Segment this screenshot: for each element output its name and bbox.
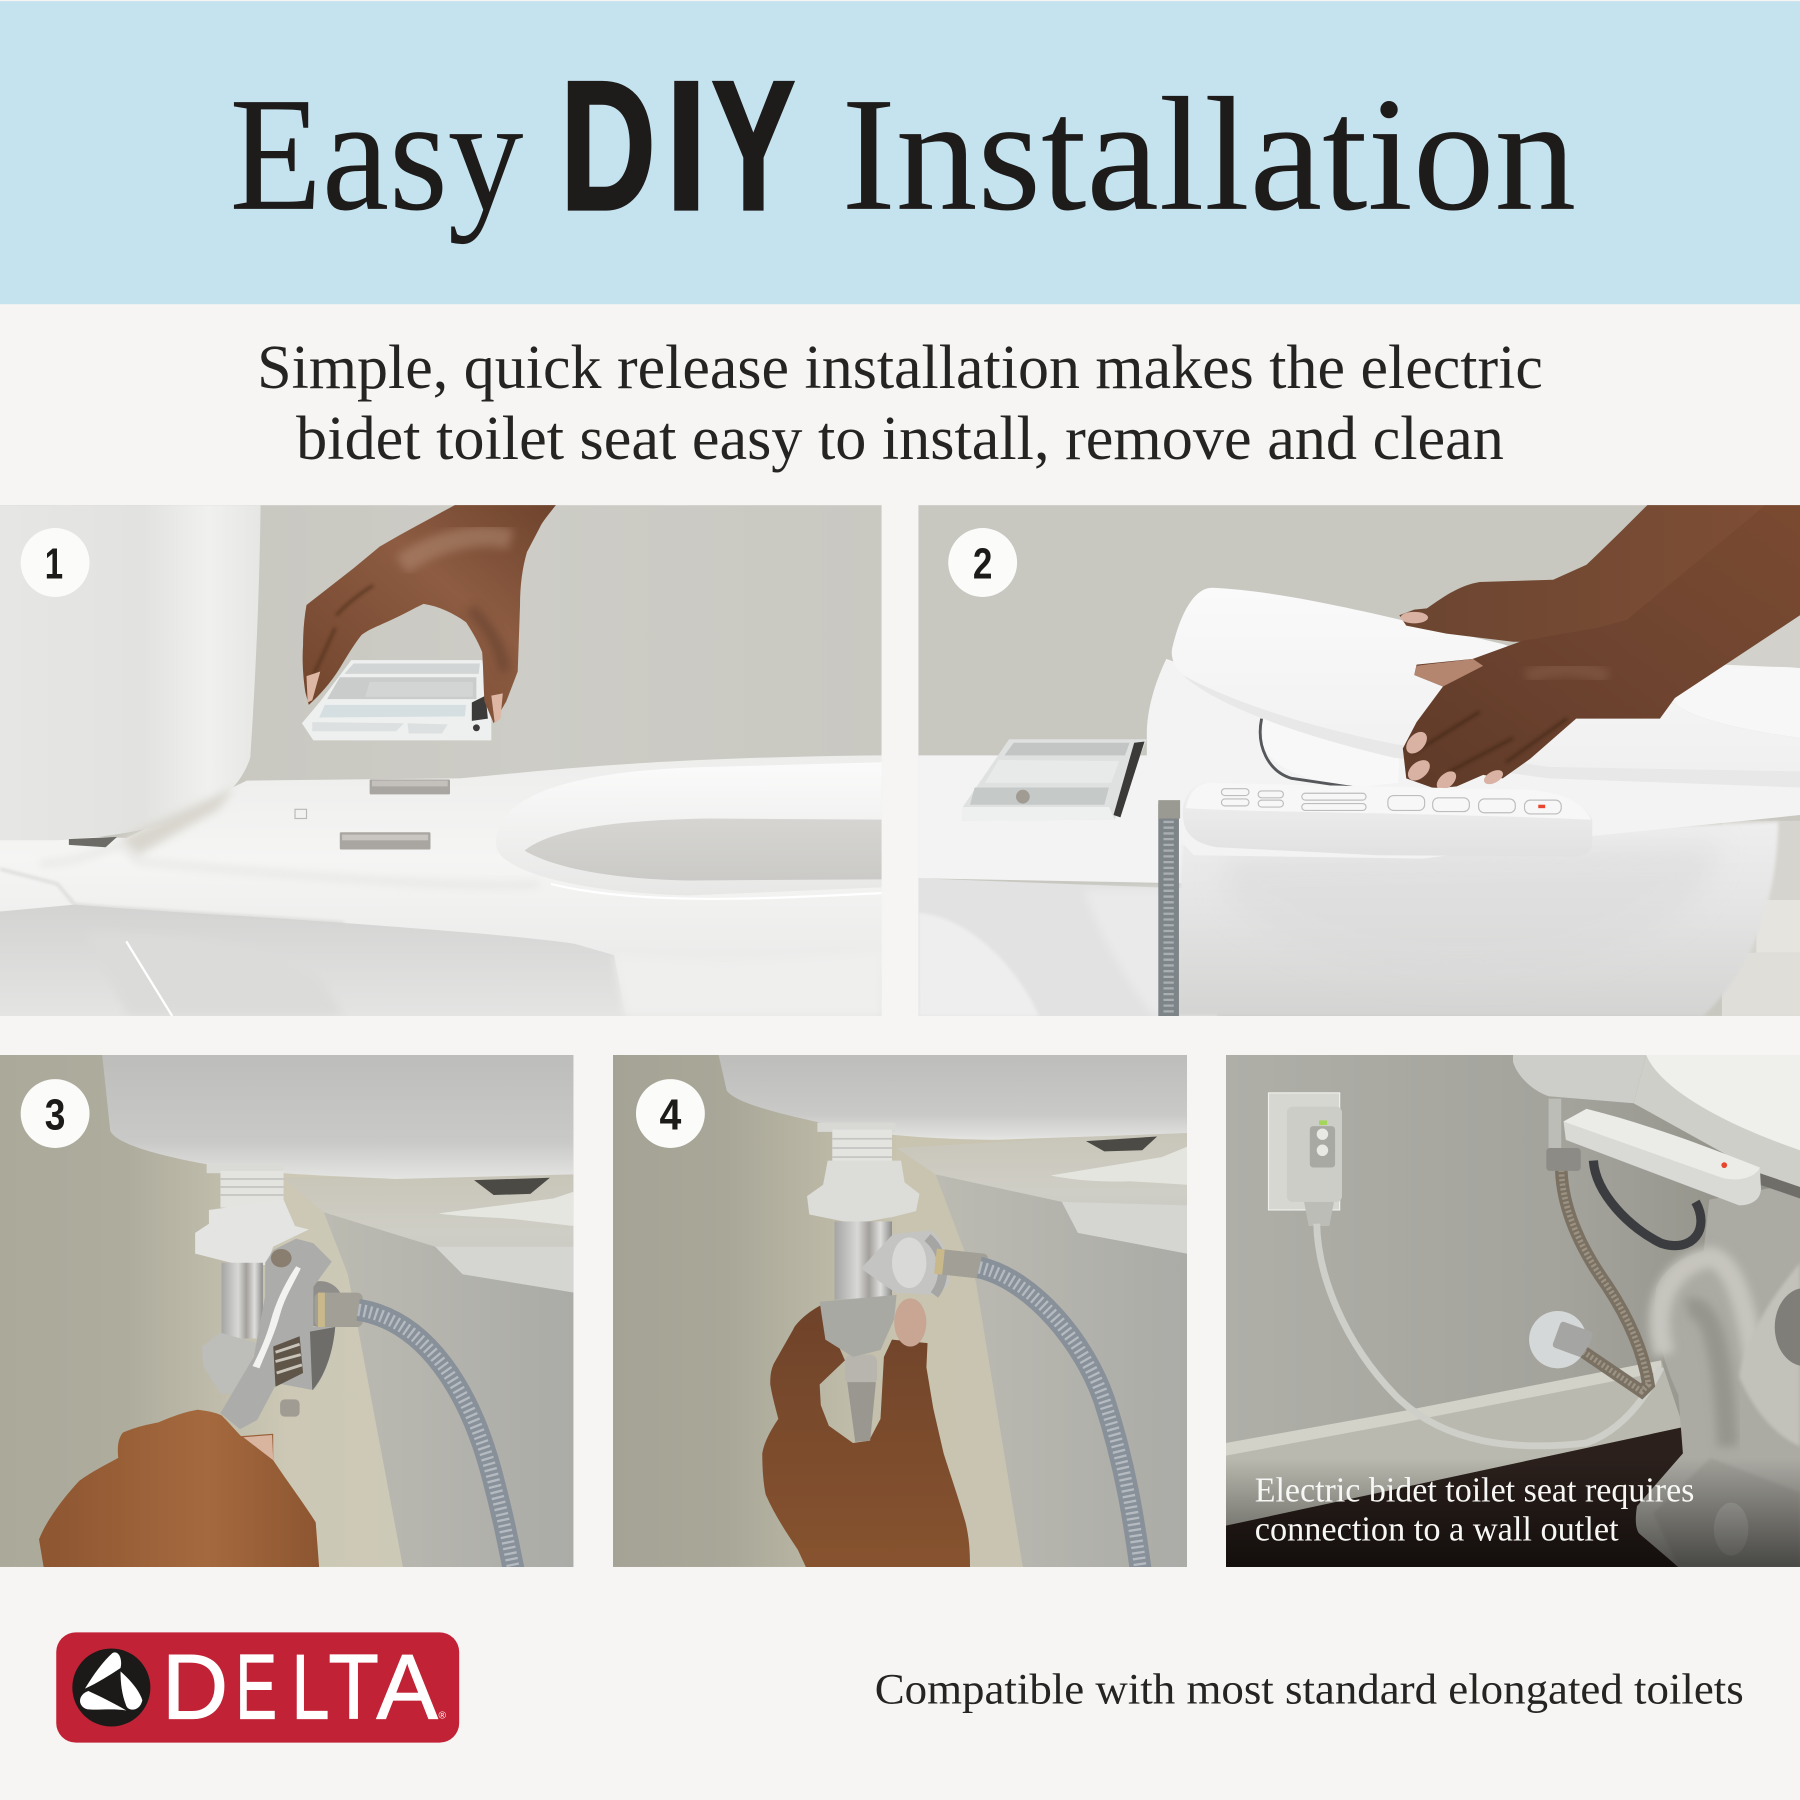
subtitle text: bidet toilet seat easy to install, remove and clean — [296, 405, 1504, 473]
caption text — [1255, 1472, 1694, 1549]
thumb nail — [894, 1298, 926, 1347]
title: I — [666, 43, 707, 249]
small logo mark — [295, 809, 307, 818]
step number badge 1 — [21, 528, 90, 597]
remote buttons — [1221, 789, 1561, 814]
logo emblem — [72, 1648, 150, 1727]
remote control — [1564, 1109, 1761, 1205]
footer compatibility note: Compatible with most standard elongated toilets — [875, 1666, 1744, 1714]
bowl — [1171, 822, 1778, 1016]
seat lid — [1646, 1055, 1800, 1150]
seat gap shadow — [1760, 1173, 1800, 1198]
threaded connector — [817, 1123, 895, 1164]
adjustable wrench — [220, 1239, 335, 1429]
step number badge 1: 1 — [45, 541, 63, 589]
hand gripping nut — [762, 1305, 970, 1567]
braided hose — [358, 1310, 514, 1573]
toilet tank — [0, 505, 261, 840]
fingernails — [1401, 612, 1505, 793]
subtitle text — [257, 334, 1543, 473]
title: Easy — [230, 65, 523, 245]
back hand and arm — [1399, 504, 1767, 643]
toilet tank — [1513, 1055, 1646, 1103]
black hose — [1593, 1161, 1701, 1246]
pedestal — [324, 1212, 574, 1567]
toilet deck left — [918, 755, 1184, 884]
hose fitting — [313, 1281, 363, 1327]
front hand and arm — [1401, 504, 1800, 793]
hose fitting — [1546, 1099, 1581, 1171]
braided hose — [979, 1267, 1141, 1573]
logo wordmark: A — [377, 1636, 439, 1738]
panel: step 3 tighten connector with wrench — [0, 1055, 574, 1573]
toilet deck — [306, 1174, 574, 1247]
title: Installation — [841, 65, 1576, 245]
flexible bolt end — [845, 1355, 877, 1442]
caption text: Electric bidet toilet seat requires — [1255, 1472, 1694, 1510]
Delta logo — [56, 1632, 459, 1743]
metal bracket lower — [340, 832, 430, 849]
floor — [1226, 1427, 1684, 1567]
threaded connector — [207, 1163, 284, 1208]
chrome tee — [222, 1263, 263, 1339]
title — [230, 43, 1576, 249]
red stop button dot — [1538, 805, 1545, 808]
toilet deck — [897, 1131, 1187, 1254]
toilet bowl body — [1636, 1182, 1800, 1567]
hand holding plate — [303, 504, 557, 723]
panel: wall outlet note — [1226, 1055, 1800, 1567]
electrical outlet plate — [1268, 1093, 1340, 1210]
pedestal left — [918, 878, 1217, 1016]
tank bolt — [1086, 1136, 1157, 1151]
plastic nut — [807, 1161, 920, 1224]
water hose — [1158, 800, 1180, 1016]
remote control panel — [1183, 783, 1592, 856]
tank bolt — [474, 1178, 550, 1195]
bottom caption shade — [1226, 1458, 1800, 1567]
pedestal — [936, 1174, 1187, 1567]
hose fitting — [934, 1249, 988, 1279]
power cord — [1317, 1224, 1661, 1446]
toilet tank — [102, 1055, 574, 1179]
subtitle text: Simple, quick release installation makes the electric — [257, 334, 1543, 402]
title: D — [560, 43, 656, 248]
step number badge 4 — [636, 1079, 705, 1148]
panel: step 4 connect hose to tee — [613, 1055, 1187, 1573]
step number badge 2: 2 — [973, 541, 992, 589]
toilet tank — [719, 1055, 1187, 1140]
baseboard — [1226, 1360, 1684, 1526]
title: Y — [712, 44, 795, 249]
logo wordmark: D — [162, 1636, 228, 1738]
toilet seat — [1634, 1055, 1800, 1187]
metal bracket upper — [370, 779, 450, 794]
toilet deck and bowl — [0, 755, 882, 1016]
step number badge 3: 3 — [45, 1092, 65, 1140]
baseboard — [1722, 821, 1800, 953]
mounting plate — [302, 660, 491, 740]
panel: step 1 place mounting plate — [0, 504, 882, 1016]
caption text: connection to a wall outlet — [1255, 1511, 1619, 1549]
hand on wrench — [39, 1410, 319, 1567]
mounting plate on deck — [962, 739, 1147, 821]
plastic nut — [195, 1200, 309, 1265]
shutoff valve — [1529, 1311, 1594, 1368]
supply hose — [1561, 1165, 1648, 1391]
seat cable — [1260, 719, 1353, 788]
logo wordmark: E — [235, 1635, 277, 1738]
step number badge 2 — [948, 528, 1017, 597]
seat body — [1147, 659, 1800, 859]
fingernails — [307, 672, 320, 703]
red stop button dot — [1721, 1162, 1727, 1168]
tank shadow gap — [69, 837, 117, 847]
registered mark: ® — [439, 1710, 447, 1721]
step number badge 3 — [21, 1079, 90, 1148]
logo wordmark: L — [292, 1637, 329, 1739]
lower nut — [202, 1333, 257, 1394]
header banner — [0, 1, 1800, 304]
logo wordmark: T — [328, 1635, 379, 1738]
lower nut — [820, 1295, 897, 1357]
GFCI plug — [1287, 1107, 1342, 1226]
chrome tee — [835, 1221, 892, 1299]
panel: step 2 attach seat — [918, 504, 1800, 1016]
step number badge 4: 4 — [660, 1092, 682, 1140]
logo wordmark — [162, 1635, 439, 1739]
seat lid — [1172, 588, 1800, 788]
chrome side valve — [861, 1231, 950, 1295]
